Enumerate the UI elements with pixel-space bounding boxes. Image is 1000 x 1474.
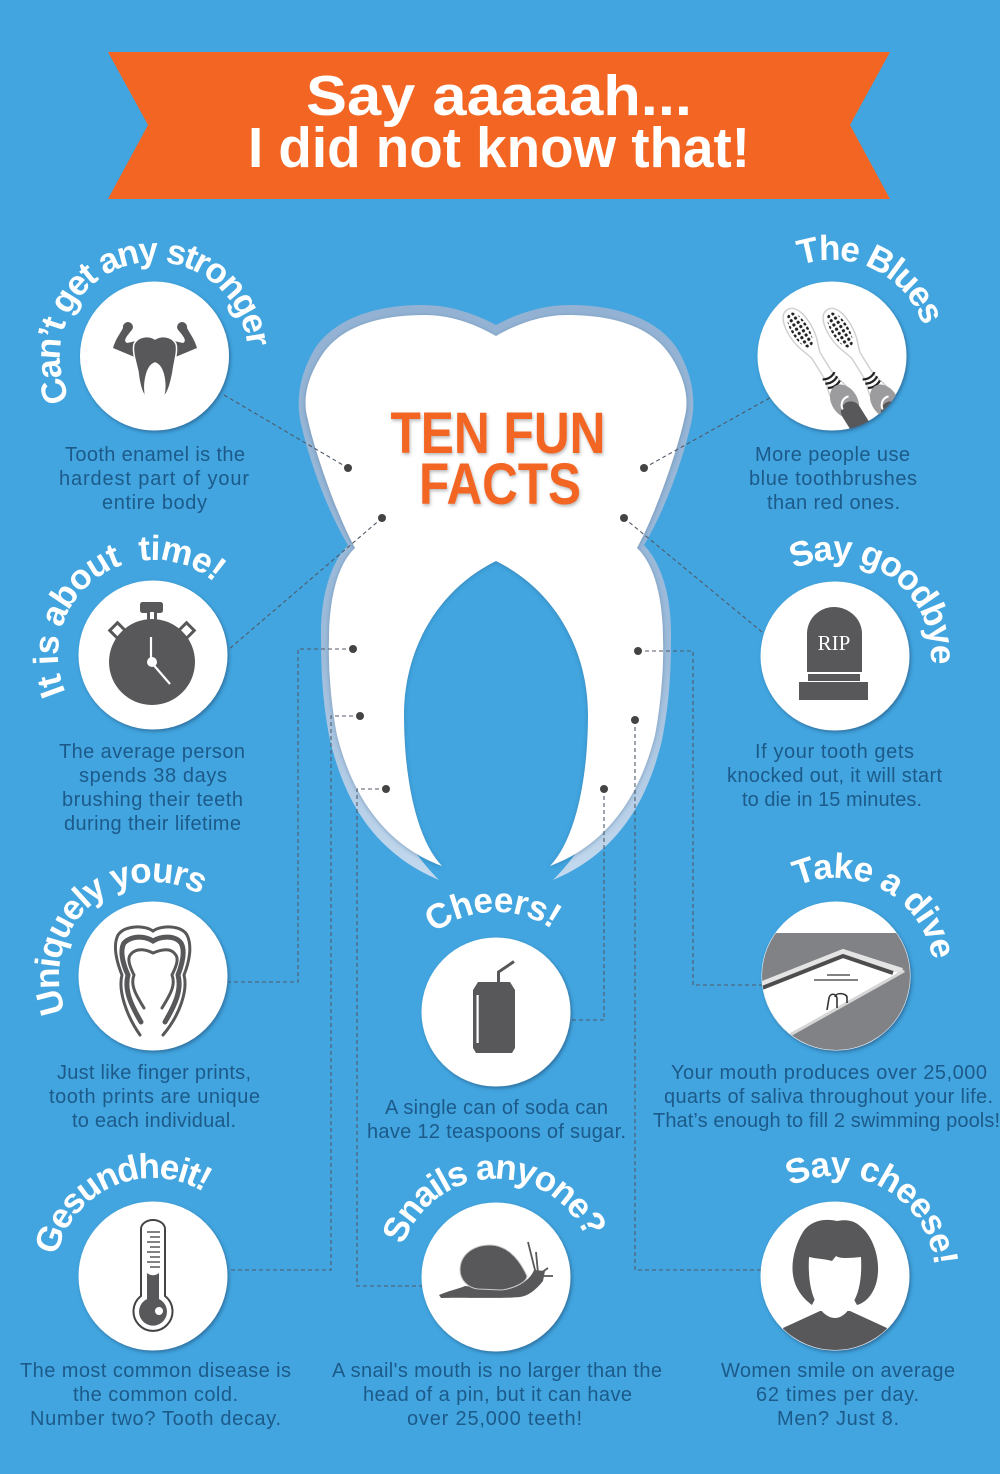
body text	[59, 741, 245, 835]
icon: toothbrushes	[782, 308, 896, 429]
body text: head of a pin, but it can have	[363, 1384, 632, 1406]
icon: soda can	[473, 962, 515, 1053]
icon: tooth print	[115, 927, 190, 1035]
title text	[248, 64, 750, 180]
panel: say cheese	[721, 1157, 958, 1430]
circle	[758, 282, 906, 430]
body text	[59, 444, 249, 514]
body text: over 25,000 teeth!	[407, 1408, 582, 1430]
panel: it is about time	[32, 534, 245, 835]
body text	[653, 1062, 1000, 1132]
body text	[20, 1360, 291, 1430]
panel: gesundheit	[20, 1152, 291, 1430]
body text: spends 38 days	[79, 765, 227, 787]
body text: Men? Just 8.	[777, 1408, 899, 1430]
circle	[78, 902, 228, 1050]
panel: uniquely yours	[34, 863, 260, 1132]
panel: the blues	[749, 234, 938, 514]
body text	[367, 1097, 626, 1143]
panel: snails anyone	[332, 1160, 662, 1430]
heading: Say goodbye	[790, 540, 950, 664]
body text	[727, 741, 942, 811]
heading: Cheers!	[426, 893, 562, 928]
body text: The average person	[59, 741, 245, 763]
circle	[760, 582, 910, 730]
body text: hardest part of your	[59, 468, 249, 490]
circle	[78, 580, 228, 730]
icon: woman portrait	[783, 1220, 887, 1360]
body text: to each individual.	[72, 1110, 236, 1132]
body text: A snail's mouth is no larger than the	[332, 1360, 662, 1382]
body text: brushing their teeth	[62, 789, 243, 811]
body text: Just like finger prints,	[57, 1062, 251, 1084]
icon: snail	[439, 1242, 553, 1298]
circle	[422, 1202, 570, 1352]
rip lettering: RIP	[818, 631, 850, 655]
icon: swimming pool	[755, 933, 912, 1053]
icon: muscular tooth	[113, 322, 197, 398]
heading: Can’t get any stronger	[38, 243, 266, 404]
body text: Number two? Tooth decay.	[30, 1408, 281, 1430]
body text	[332, 1360, 662, 1430]
circle	[762, 902, 910, 1050]
connector lines	[224, 395, 775, 1286]
body text: knocked out, it will start	[727, 765, 942, 787]
body text: The most common disease is	[20, 1360, 291, 1382]
tooth outline band	[299, 305, 693, 880]
body text: blue toothbrushes	[749, 468, 917, 490]
heading: ten fun facts: TEN FUN	[390, 401, 606, 466]
circle	[760, 1202, 910, 1350]
body text: A single can of soda can	[385, 1097, 608, 1119]
central tooth	[299, 305, 693, 880]
body text	[721, 1360, 955, 1430]
icon: stopwatch	[109, 602, 195, 705]
body text: tooth prints are unique	[49, 1086, 260, 1108]
heading: Gesundheit!	[36, 1152, 212, 1252]
body text: to die in 15 minutes.	[742, 789, 922, 811]
body text: Tooth enamel is the	[65, 444, 245, 466]
body text: 62 times per day.	[756, 1384, 919, 1406]
circle	[422, 938, 570, 1086]
title text: Say aaaaah...	[306, 64, 692, 128]
body text: Women smile on average	[721, 1360, 955, 1382]
heading: Snails anyone?	[384, 1160, 605, 1242]
body text: the common cold.	[73, 1384, 238, 1406]
title banner	[108, 52, 890, 199]
banner ribbon	[108, 52, 890, 199]
title text: I did not know that!	[248, 116, 750, 180]
body text: More people use	[755, 444, 910, 466]
heading: Say cheese!	[786, 1157, 958, 1262]
panel: say goodbye	[727, 540, 950, 811]
body text: Your mouth produces over 25,000	[671, 1062, 987, 1084]
heading: Uniquely yours	[34, 863, 205, 1016]
panel: can't get any stronger	[38, 243, 266, 514]
panel: take a dive	[653, 852, 1000, 1132]
heading: ten fun facts: FACTS	[419, 452, 581, 517]
heading: ten fun facts	[390, 401, 606, 517]
icon: thermometer	[134, 1220, 172, 1331]
body text: during their lifetime	[64, 813, 241, 835]
heading: It is about time!	[32, 534, 226, 698]
body text: entire body	[102, 492, 207, 514]
heading: The Blues	[795, 234, 938, 323]
body text: If your tooth gets	[755, 741, 914, 763]
body text: than red ones.	[767, 492, 900, 514]
body text: That’s enough to fill 2 swimming pools!	[653, 1110, 1000, 1132]
heading: Take a dive	[790, 852, 950, 958]
body text	[49, 1062, 260, 1132]
body text: have 12 teaspoons of sugar.	[367, 1121, 626, 1143]
panel: cheers	[367, 893, 626, 1143]
icon: gravestone	[799, 607, 868, 700]
circle	[78, 1202, 228, 1350]
connector dots	[344, 464, 648, 793]
tooth body	[306, 315, 686, 866]
circle	[80, 282, 229, 430]
body text: quarts of saliva throughout your life.	[664, 1086, 993, 1108]
body text	[749, 444, 917, 514]
